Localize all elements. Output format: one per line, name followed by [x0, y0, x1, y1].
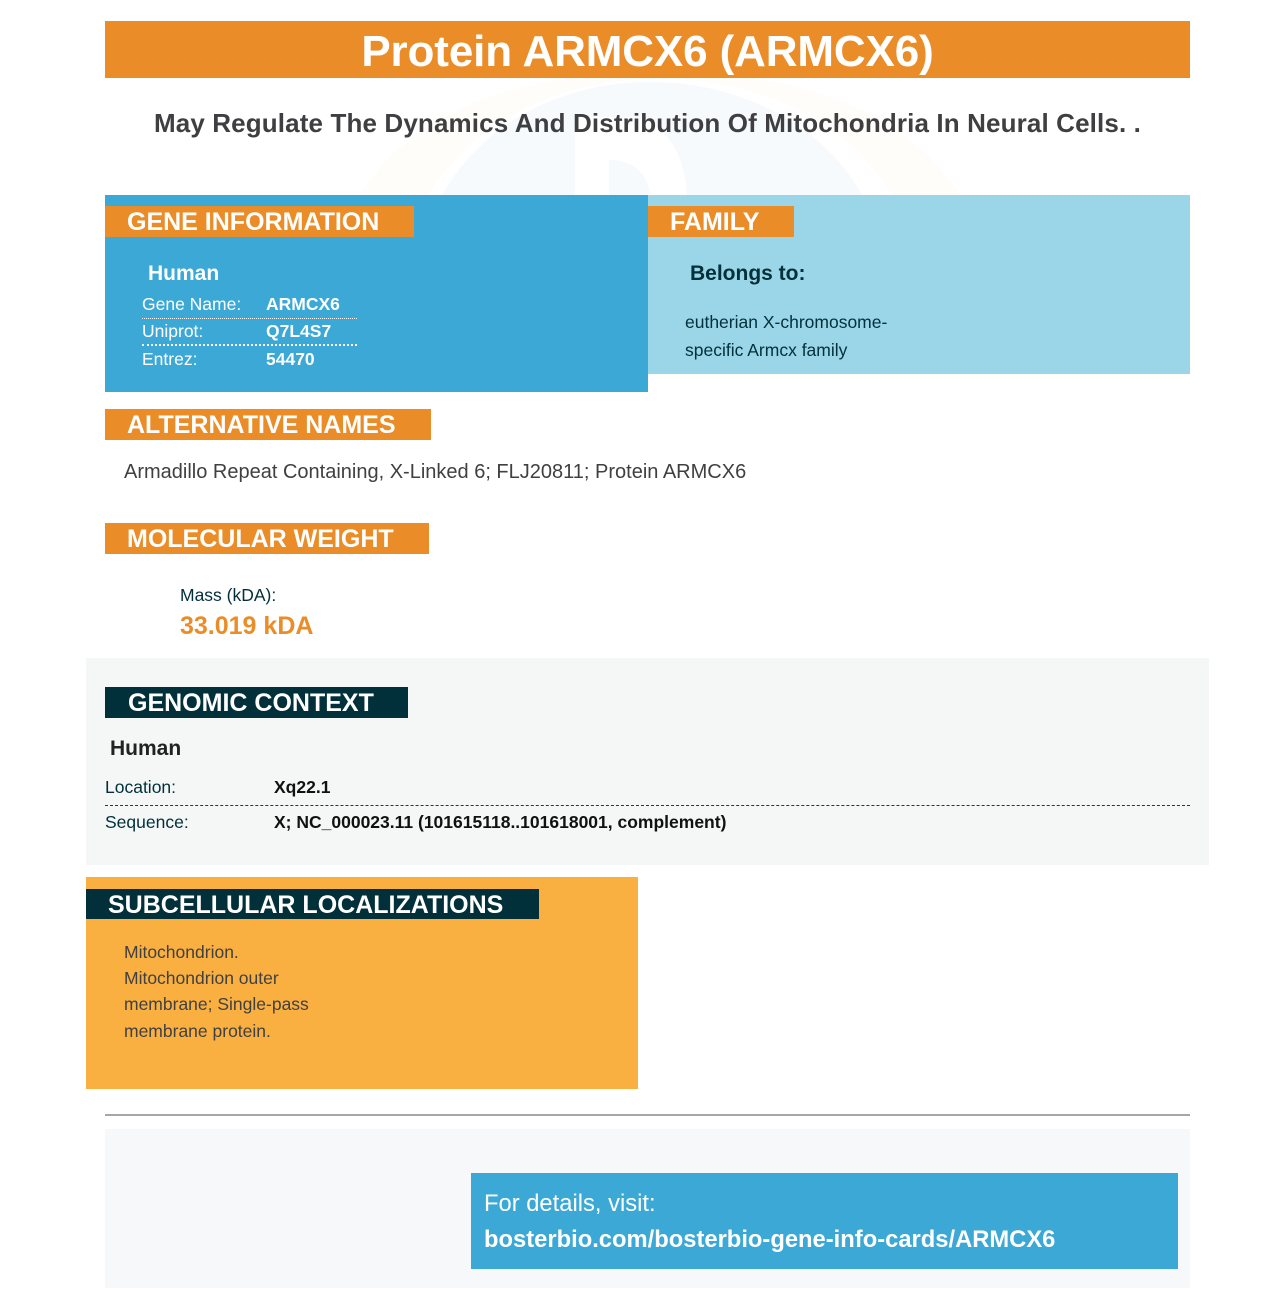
heading: molecular weight: MOLECULAR WEIGHT	[127, 525, 394, 553]
panel: footer	[105, 1129, 1190, 1288]
species label: Human	[110, 737, 181, 760]
heading: family: FAMILY	[670, 208, 759, 236]
uniprot row: Q7L4S7	[266, 321, 331, 341]
mass value: 33.019 kDA	[180, 612, 313, 640]
species label: Human	[148, 262, 219, 285]
subtitle: May Regulate The Dynamics And Distribution Of Mitochondria In Neural Cells. .	[154, 108, 1141, 138]
footer divider	[105, 1114, 1190, 1116]
heading: family	[648, 206, 794, 237]
family description: specific Armcx family	[685, 340, 847, 360]
localization text: membrane; Single-pass	[124, 994, 309, 1014]
watermark logo	[442, 82, 862, 195]
sequence row: Sequence:	[105, 812, 189, 832]
location row: Xq22.1	[274, 777, 330, 797]
uniprot row: Uniprot:	[142, 321, 203, 341]
entrez row: 54470	[266, 349, 315, 369]
localization text: Mitochondrion.	[124, 942, 239, 962]
callout url: bosterbio.com/bosterbio-gene-info-cards/ARMCX6	[484, 1226, 1055, 1253]
localization text	[124, 942, 309, 1041]
gene name row: Gene Name:	[142, 294, 241, 314]
title banner: Protein ARMCX6 (ARMCX6)	[361, 27, 934, 76]
localization text: Mitochondrion outer	[124, 968, 279, 988]
location row	[105, 775, 1190, 806]
localization text: membrane protein.	[124, 1021, 271, 1041]
title banner	[105, 21, 1190, 78]
panel: gene information	[105, 195, 648, 392]
heading: gene information: GENE INFORMATION	[127, 208, 379, 236]
panel: subcellular localizations	[86, 877, 638, 1089]
family description: eutherian X-chromosome-	[685, 312, 887, 332]
gene name row	[142, 292, 357, 319]
heading: genomic context: GENOMIC CONTEXT	[128, 689, 374, 717]
belongs to label: Belongs to:	[690, 262, 806, 285]
gene name row: ARMCX6	[266, 294, 340, 314]
callout: details link	[471, 1173, 1178, 1269]
panel: genomic context	[86, 658, 1209, 865]
location row: Location:	[105, 777, 176, 797]
heading: alternative names: ALTERNATIVE NAMES	[127, 411, 396, 439]
entrez row	[142, 349, 315, 369]
entrez row: Entrez:	[142, 349, 197, 369]
callout label: For details, visit:	[484, 1190, 656, 1217]
panel: family	[648, 195, 1190, 374]
family description	[685, 312, 887, 360]
sequence row: X; NC_000023.11 (101615118..101618001, complement)	[274, 812, 726, 832]
mass label: Mass (kDA):	[180, 585, 276, 605]
alternative names text: Armadillo Repeat Containing, X-Linked 6; FLJ20811; Protein ARMCX6	[124, 461, 746, 483]
heading: subcellular localizations: SUBCELLULAR LOCALIZATIONS	[108, 891, 503, 919]
uniprot row	[142, 319, 357, 346]
